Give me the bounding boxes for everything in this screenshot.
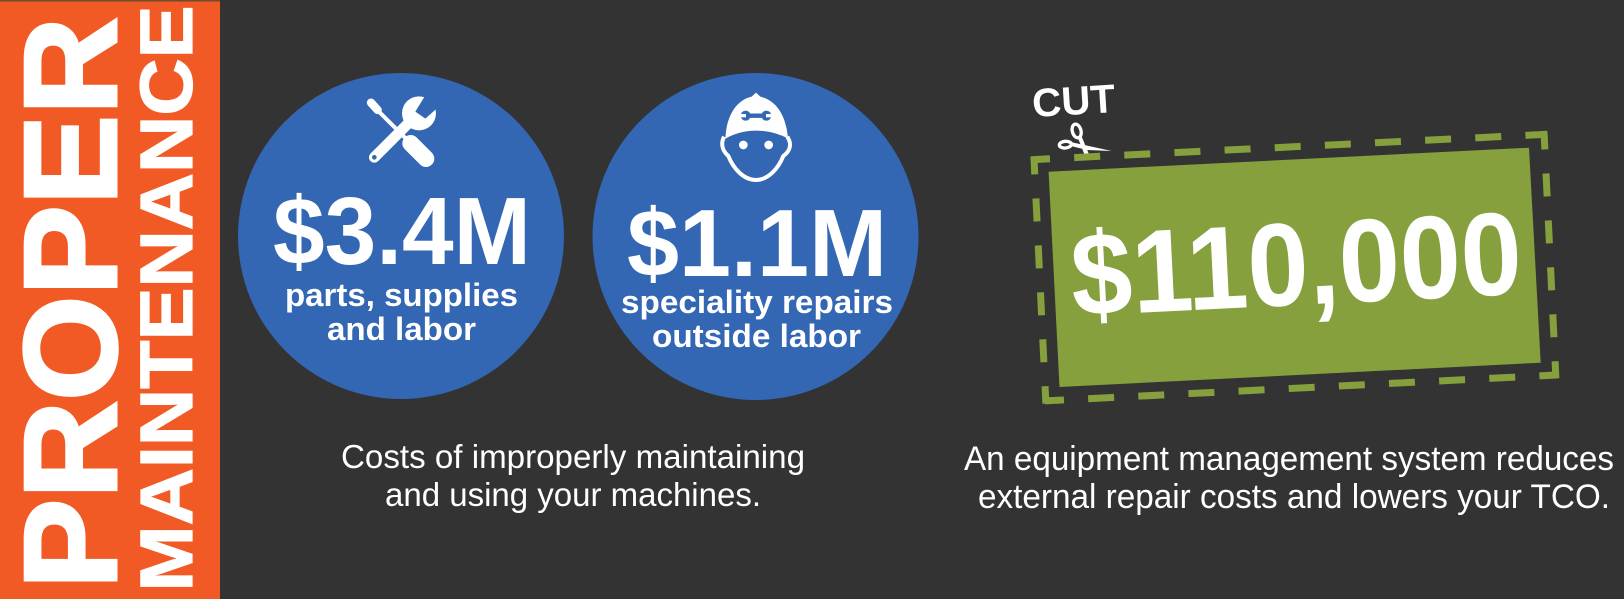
stat: $1.1M: $1.1M <box>627 190 887 297</box>
label: parts, supplies and labor: and labor <box>327 311 476 347</box>
label: speciality repairs outside labor <box>621 284 893 354</box>
callout: CUT label: CUT <box>1031 77 1116 126</box>
coupon body <box>1049 148 1541 387</box>
icon: scissors <box>1059 123 1112 157</box>
label: parts, supplies and labor: parts, supplies <box>285 277 518 313</box>
text block: costs caption <box>341 438 805 513</box>
text block: coupon caption: external repair costs and lowers your TCO. <box>978 478 1610 516</box>
heading: PROPER: PROPER <box>0 17 144 589</box>
panel: orange title banner <box>0 0 220 599</box>
panel: blue circle repair cost <box>592 73 918 400</box>
text block: coupon caption <box>964 440 1614 516</box>
label: speciality repairs outside labor: speciality repairs <box>621 284 893 320</box>
label: speciality repairs outside labor: outside labor <box>652 318 861 354</box>
heading: MAINTENANCE: MAINTENANCE <box>125 6 208 592</box>
text block: costs caption: Costs of improperly maintaining <box>341 438 805 475</box>
panel: green coupon <box>1031 132 1558 404</box>
panel: blue circle parts cost <box>238 73 564 399</box>
icon: wrench and screwdriver <box>371 95 442 160</box>
stat: $3.4M: $3.4M <box>273 178 531 285</box>
amount: $110,000: $110,000 <box>1068 188 1525 342</box>
label: parts, supplies and labor <box>285 277 518 347</box>
text block: costs caption: and using your machines. <box>385 476 761 513</box>
icon: mechanic head with helmet <box>722 93 790 180</box>
text block: coupon caption: An equipment management system reduces <box>964 440 1614 478</box>
coupon dashed border <box>1031 132 1558 404</box>
